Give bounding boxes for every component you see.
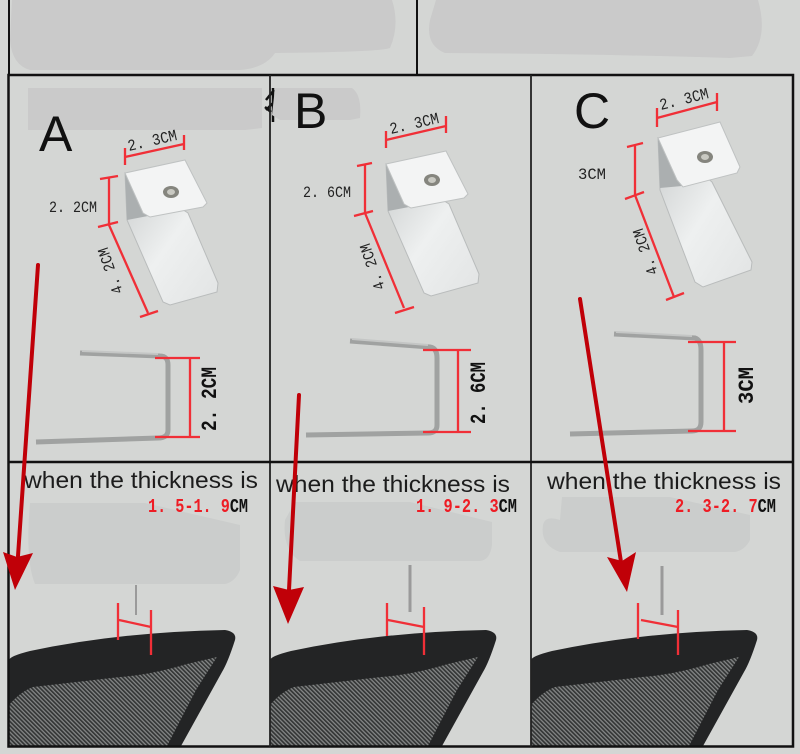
U bracket side view C: 3CM (735, 367, 760, 404)
thickness caption C: when the thickness is (546, 468, 781, 494)
bracket A photo (125, 160, 218, 305)
measure C (638, 566, 678, 655)
letter B: B (294, 83, 327, 139)
U bracket side view B (306, 339, 492, 435)
dimensions A: 2. 3CM (126, 127, 179, 156)
thickness caption B (275, 471, 517, 518)
dimensions A: 4. 2CM (95, 245, 128, 296)
arrow A (3, 265, 38, 590)
thickness caption C (546, 468, 781, 518)
measure A (118, 603, 151, 655)
dimensions C: 3CM (578, 166, 606, 184)
dimensions C: 2. 3CM (658, 85, 711, 115)
measure B (387, 565, 424, 655)
dimensions B: 2. 3CM (388, 110, 441, 139)
top row panels (9, 0, 762, 74)
blurred patch A (28, 88, 262, 130)
chair B (270, 630, 496, 746)
U bracket side view A: 2. 2CM (198, 367, 223, 431)
thickness caption A: 1. 5-1. 9CM (148, 496, 248, 518)
U bracket side view C (570, 332, 760, 434)
dimensions A (49, 127, 184, 317)
letter A: A (39, 106, 73, 162)
arrow C (580, 299, 636, 592)
thickness caption B: 1. 9-2. 3CM (416, 496, 517, 518)
dimensions B: 2. 6CM (303, 184, 351, 202)
panel: B (272, 83, 492, 435)
lower patches (28, 497, 750, 584)
U bracket side view A (36, 351, 223, 442)
thickness caption A (23, 467, 258, 518)
dimensions C (578, 85, 717, 300)
U bracket side view B: 2. 6CM (467, 362, 492, 424)
letter C: C (574, 83, 610, 139)
thickness caption B: when the thickness is (275, 471, 510, 497)
bracket B photo (386, 151, 479, 296)
dimensions A: 2. 2CM (49, 199, 97, 217)
chair C (531, 630, 757, 746)
dimensions B: 4. 2CM (357, 241, 390, 292)
fragment of erased glyph (265, 88, 274, 122)
chair A (9, 585, 235, 746)
arrow B (273, 395, 304, 624)
dimensions C: 4. 2CM (630, 226, 663, 277)
thickness caption A: when the thickness is (23, 467, 258, 493)
panel: A (28, 88, 262, 442)
blurred patch B (272, 88, 360, 120)
thickness caption C: 2. 3-2. 7CM (675, 496, 776, 518)
dimensions B (303, 110, 446, 313)
bracket C photo (658, 122, 752, 287)
panel: C (570, 83, 760, 434)
